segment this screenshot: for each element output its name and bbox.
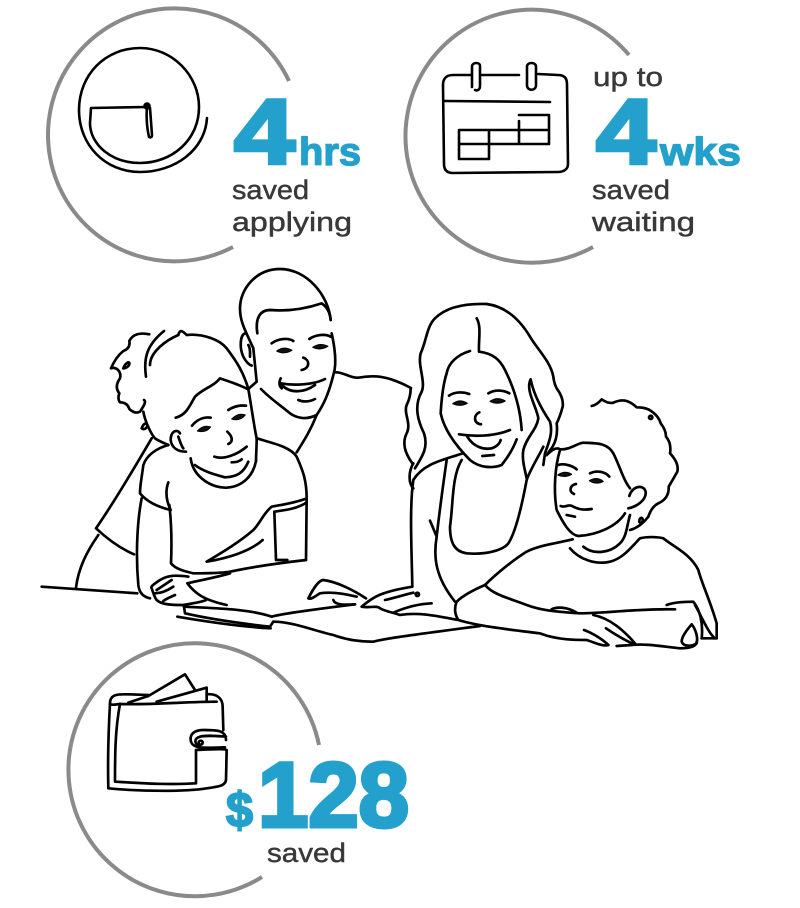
stat: 4 wks <box>596 82 741 184</box>
panel: weeks saved waiting <box>405 10 741 263</box>
panel: hours saved applying <box>48 8 361 261</box>
label: saved applying: saved <box>232 175 309 205</box>
centre hand <box>308 580 366 605</box>
label: saved applying: applying <box>232 207 352 237</box>
panel: money saved <box>68 643 409 896</box>
circle outline: money <box>68 643 319 896</box>
label: saved waiting: saved <box>592 175 670 205</box>
open book <box>177 604 480 642</box>
mother hand <box>362 587 458 620</box>
daughter body <box>137 438 307 598</box>
son body <box>455 515 717 648</box>
stat: 4 hrs: 4 <box>234 82 295 184</box>
stat: 4 hrs: hrs <box>299 131 361 174</box>
stat: 4 wks: wks <box>659 131 741 174</box>
daughter hand <box>151 573 230 605</box>
illustration: family reading together <box>42 269 717 648</box>
icon: clock <box>79 48 207 172</box>
mother body <box>411 447 543 602</box>
father body <box>76 372 411 588</box>
table edge <box>42 587 137 593</box>
circle outline: weeks <box>405 10 629 263</box>
figure: father and daughter <box>42 269 480 642</box>
label: saved applying <box>232 175 352 237</box>
icon: calendar <box>443 63 568 173</box>
mother hair <box>404 304 563 488</box>
icon: wallet <box>108 674 227 791</box>
daughter head <box>111 331 257 488</box>
figure: mother and son <box>362 304 717 648</box>
label: saved waiting <box>591 175 695 237</box>
label: saved waiting: waiting <box>591 207 695 237</box>
mother face <box>441 351 517 467</box>
circle outline: hours <box>48 8 289 261</box>
stat: $128: $ <box>226 784 253 838</box>
label: saved: saved <box>267 838 346 868</box>
father head <box>240 269 335 418</box>
son head <box>547 399 678 536</box>
stat: $128: 128 <box>258 744 409 846</box>
stat: 4 hrs <box>234 82 361 184</box>
stat: 4 wks: 4 <box>596 82 656 184</box>
label: up to: up to <box>593 62 663 92</box>
